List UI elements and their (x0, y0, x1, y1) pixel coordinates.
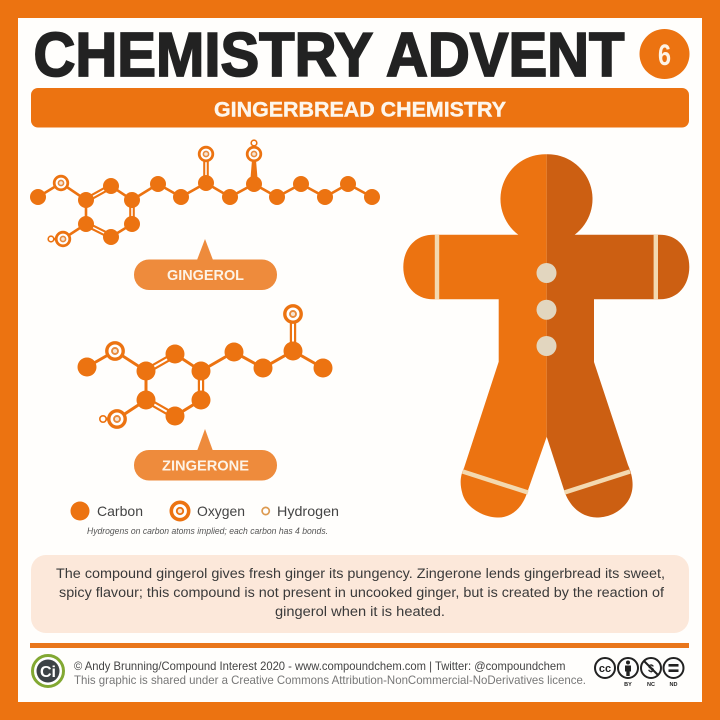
illustration: gingerbread man (403, 154, 689, 518)
legend: carbon (70, 502, 143, 520)
subtitle banner (31, 88, 689, 128)
legend note: Hydrogens on carbon atoms implied; each carbon has 4 bonds. (87, 526, 328, 536)
description panel: gingerol when it is heated. (275, 604, 445, 619)
icon: CC: cc (599, 663, 611, 675)
buttons (536, 263, 556, 356)
day number badge (640, 29, 690, 79)
gingerol hydrogen atoms (48, 140, 257, 242)
credits: This graphic is shared under a Creative Commons Attribution-NonCommercial-NoDerivatives licence. (74, 673, 586, 687)
legend: carbon: Carbon (97, 503, 143, 519)
icon: BY: BY (624, 682, 632, 688)
icon: ND: ND (670, 682, 677, 688)
icon: NC: $ (648, 663, 654, 675)
credits: © Andy Brunning/Compound Interest 2020 - www.compoundchem.com | Twitter: @compoundchem (74, 659, 566, 673)
title: CHEMISTRY ADVENT (34, 21, 625, 90)
gingerol bonds (38, 183, 372, 239)
molecule: gingerol (30, 140, 380, 246)
day number badge: 6 (658, 39, 671, 72)
description panel (31, 555, 689, 633)
molecule: zingerone (78, 306, 332, 427)
legend: hydrogen: Hydrogen (277, 503, 339, 519)
label: gingerol (134, 239, 277, 290)
zingerone carbon atoms (78, 342, 332, 426)
icing stripes (437, 235, 656, 492)
icon: NC (641, 658, 661, 688)
Creative Commons icons (595, 658, 684, 688)
zingerone double bonds (150, 322, 293, 414)
gingerol double bonds (90, 160, 206, 235)
icon: NC: NC (647, 682, 655, 688)
credits (74, 659, 586, 687)
gingerol wedge bond (250, 160, 258, 184)
legend: oxygen (171, 502, 245, 520)
description panel: The compound gingerol gives fresh ginger its pungency. Zingerone lends gingerbread its sweet, (56, 566, 665, 581)
gingerol oxygen atoms (54, 147, 261, 246)
zingerone hydrogen atom (100, 416, 106, 422)
legend (70, 502, 339, 536)
gingerbread left half (403, 154, 547, 518)
zingerone bonds (87, 351, 323, 419)
label: zingerone: ZINGERONE (162, 458, 249, 474)
label: gingerol: GINGEROL (167, 267, 244, 284)
description panel: spicy flavour; this compound is not present in uncooked ginger, but is created by the reaction of (59, 585, 664, 600)
gingerol carbon atoms (30, 175, 380, 245)
Compound Interest logo (32, 656, 64, 686)
gingerbread right half (547, 154, 689, 518)
zingerone oxygen atoms (107, 306, 301, 427)
Compound Interest logo: Ci (40, 664, 56, 681)
legend: oxygen: Oxygen (197, 503, 245, 519)
footer rule (30, 643, 689, 648)
label: zingerone (134, 429, 277, 480)
subtitle banner: GINGERBREAD CHEMISTRY (214, 98, 506, 122)
